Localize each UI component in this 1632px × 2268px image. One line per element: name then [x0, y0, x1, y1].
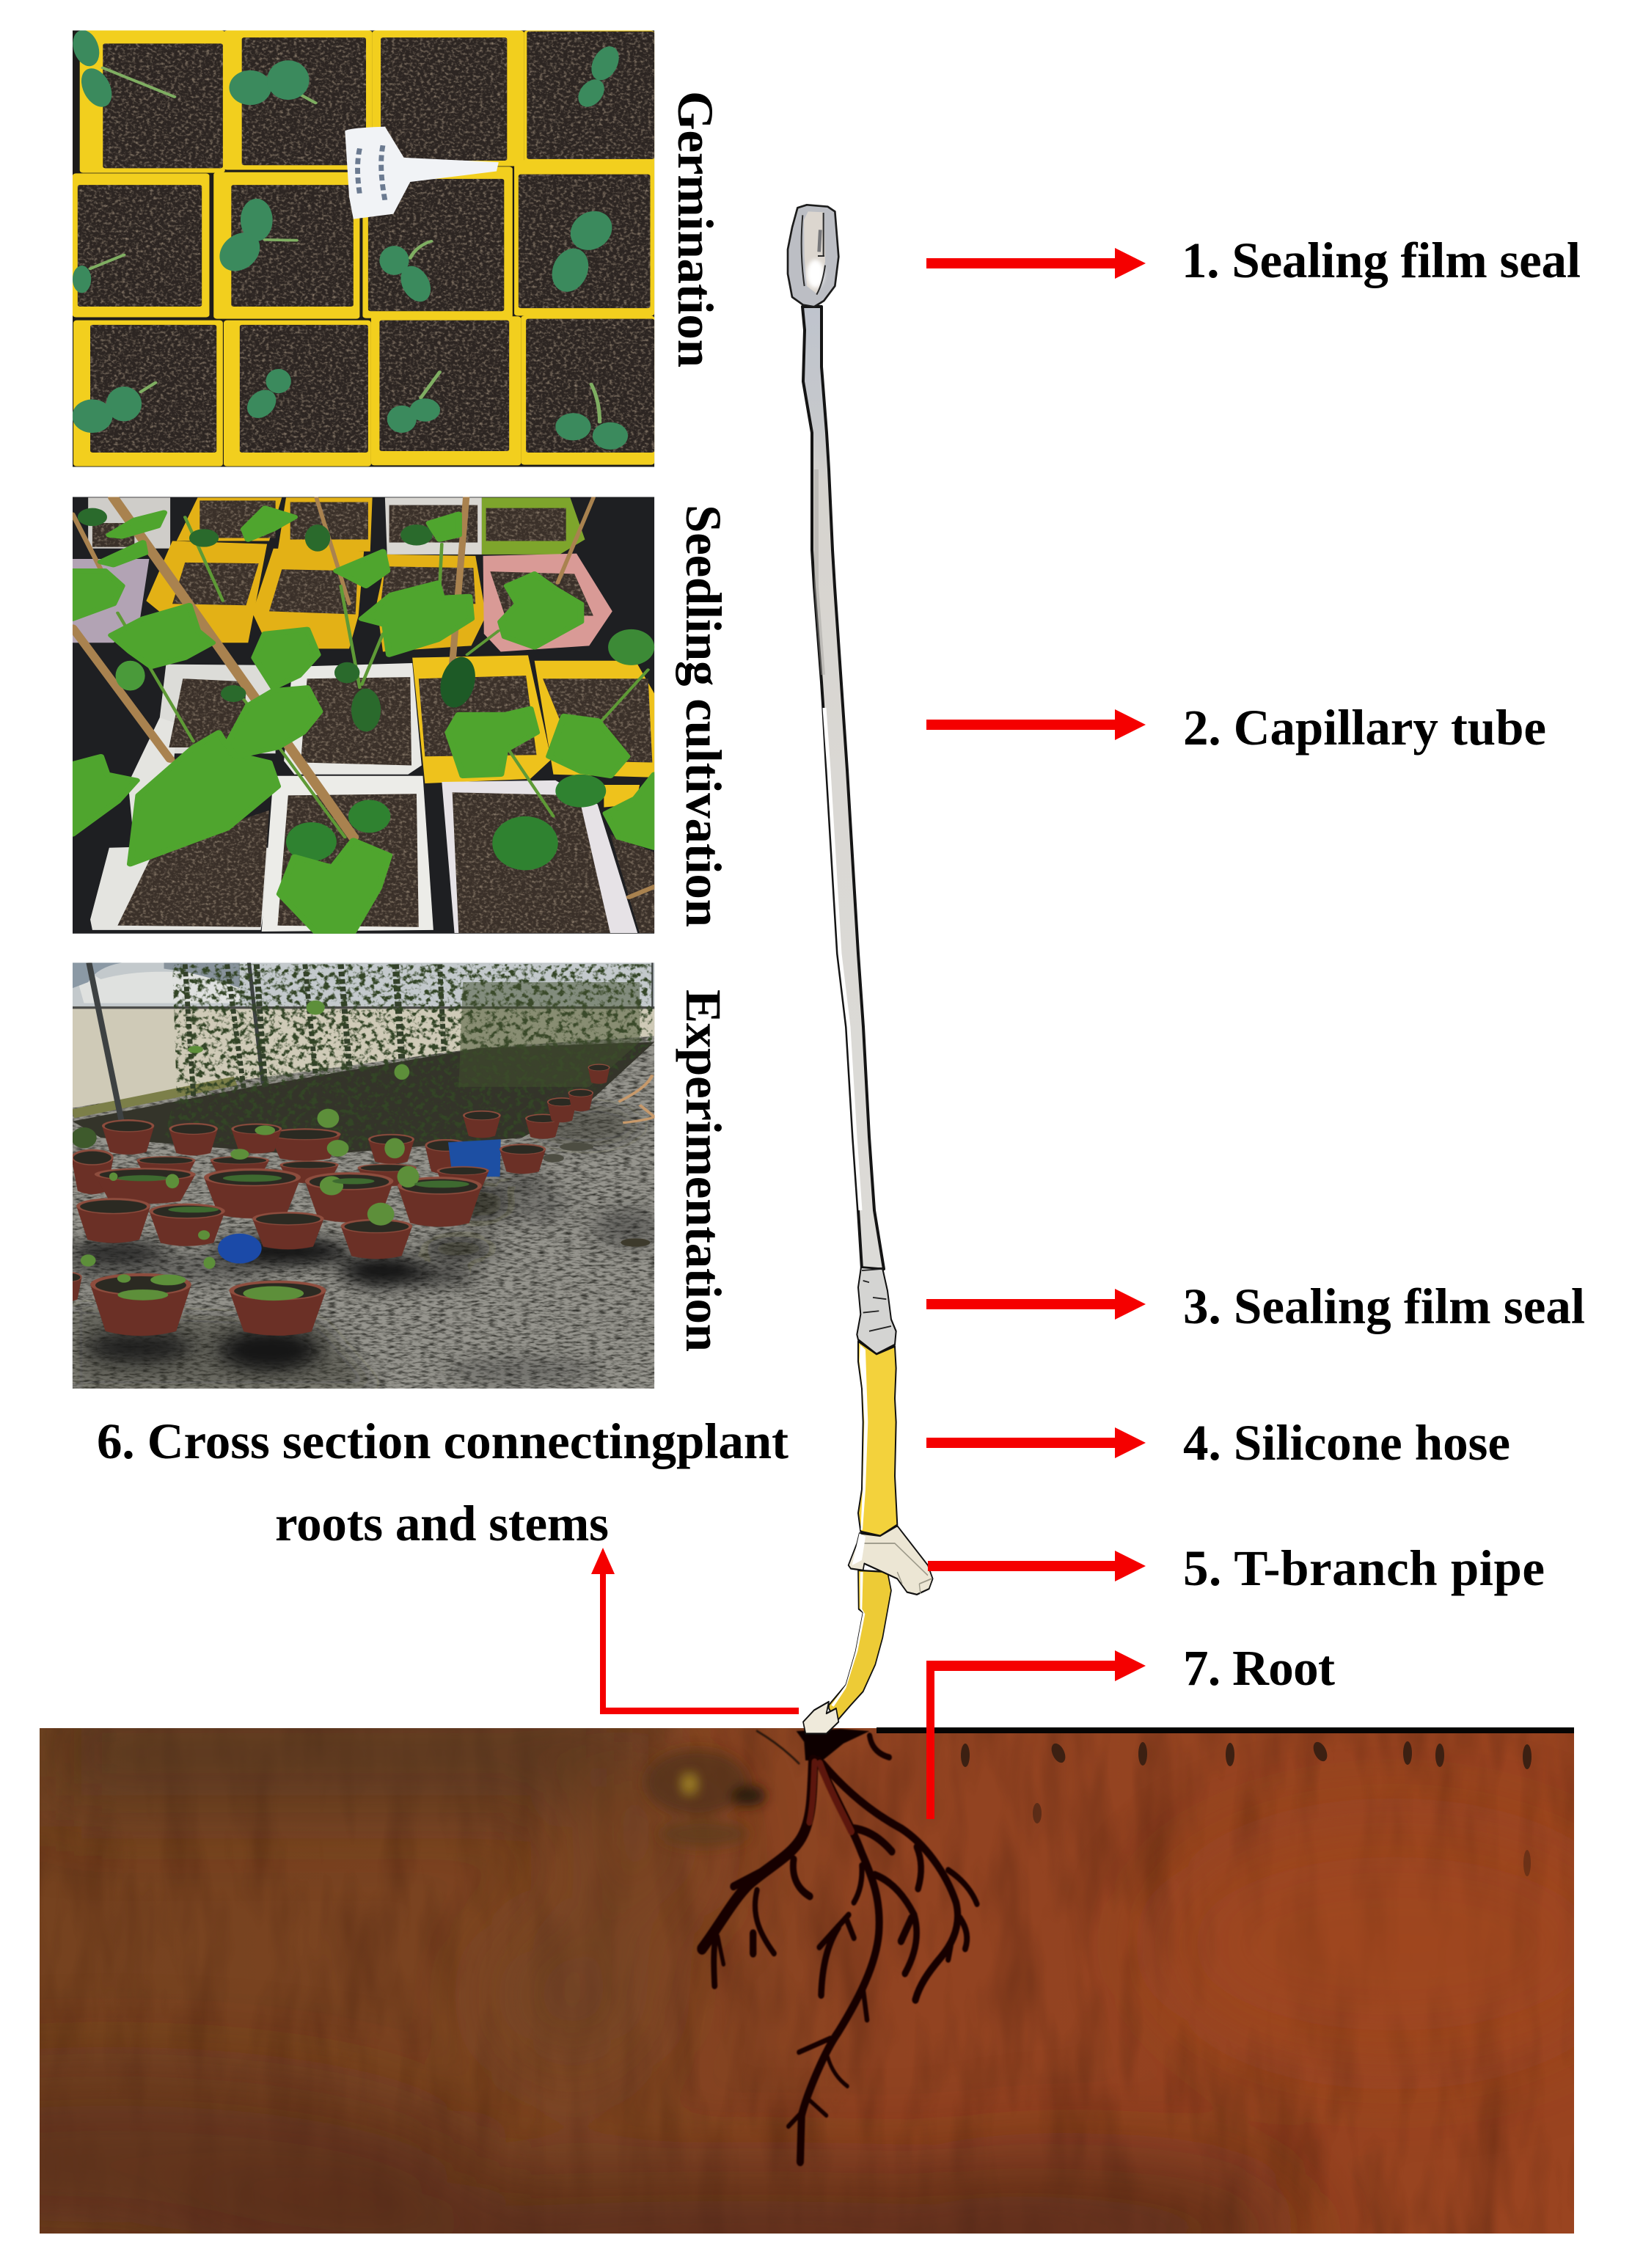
- capillary tube: [802, 307, 884, 1269]
- arrow 1: [926, 248, 1146, 279]
- reddish inner root tone: [809, 1762, 815, 1822]
- left root: [702, 1760, 813, 1949]
- top sealing film seal: [788, 205, 838, 307]
- seedling leaves: [69, 29, 628, 450]
- label 6: 6. Cross section connectingplant: [97, 1413, 788, 1469]
- ground: [73, 962, 654, 1389]
- soil panel: [0, 1709, 1628, 2268]
- terracotta pots: [71, 1064, 610, 1194]
- label 5: 5. T-branch pipe: [1183, 1540, 1545, 1596]
- soil shading: [0, 1709, 1628, 2268]
- label 6: [97, 1413, 788, 1551]
- arrow 7: root: [926, 1650, 1146, 1819]
- label 3: 3. Sealing film seal: [1183, 1279, 1585, 1334]
- central root: [800, 1760, 879, 2162]
- photo: germination seedlings in yellow pots: [69, 29, 654, 467]
- photo: experimentation in greenhouse: [52, 962, 661, 1389]
- stem cross-section tip: [803, 1702, 838, 1734]
- ground shade patches: [73, 1105, 661, 1389]
- potting soil: [92, 500, 654, 933]
- lower sealing film wrap: [857, 1267, 896, 1354]
- silicone hose: [858, 1342, 897, 1536]
- sky and film: [73, 962, 654, 1008]
- lower assembly: seal, hose, T-branch, tip: [803, 1267, 933, 1734]
- arrow 2: [926, 709, 1146, 740]
- seedling stems: [90, 68, 600, 422]
- ground line: [877, 1727, 1574, 1733]
- white plant tag: [345, 127, 499, 219]
- seedlings in pots: [71, 1001, 469, 1301]
- soil cracks near the stem: [757, 1731, 799, 1763]
- label 1: 1. Sealing film seal: [1182, 233, 1581, 288]
- right root: [822, 1763, 958, 2000]
- greenhouse wall: [73, 1008, 654, 1108]
- arrow 6: cross section: [591, 1548, 799, 1714]
- pots: [73, 497, 654, 933]
- arrow 3: [926, 1289, 1146, 1320]
- dense foliage: [164, 964, 652, 1153]
- lower hose section: [829, 1570, 891, 1722]
- label 2: 2. Capillary tube: [1183, 700, 1546, 756]
- bright true leaves: [73, 508, 654, 932]
- hose coil and paving stones: [543, 1075, 654, 1247]
- label 7: 7. Root: [1183, 1640, 1335, 1696]
- greenhouse poles: [89, 962, 652, 1123]
- potting soil: [78, 32, 654, 453]
- bamboo sticks: [73, 497, 654, 897]
- arrow 5: [928, 1551, 1146, 1581]
- ground shadows: [71, 1177, 547, 1371]
- blue plastic bag: [218, 1234, 262, 1263]
- plant stems: [117, 517, 648, 837]
- terracotta pots, front rows: [52, 1144, 546, 1336]
- roots: [702, 1729, 977, 2162]
- vertical label: Germination: Germination: [667, 91, 723, 367]
- dark cotyledon leaves: [78, 508, 654, 870]
- dark soil pits: [961, 1740, 1532, 1876]
- label 6: roots and stems: [275, 1496, 609, 1551]
- blue bucket: [448, 1139, 501, 1177]
- vertical label: Seedling cultivation: Seedling cultivation: [676, 505, 731, 927]
- climbing vines: [185, 964, 444, 1096]
- label 4: 4. Silicone hose: [1183, 1415, 1510, 1471]
- root crown: [797, 1729, 870, 1760]
- T-branch pipe: [849, 1526, 933, 1595]
- yellow pots: [73, 31, 654, 467]
- vertical label: Experimentation: Experimentation: [676, 989, 731, 1352]
- photo: seedling cultivation in trays: [73, 497, 654, 934]
- arrow 4: [926, 1427, 1146, 1458]
